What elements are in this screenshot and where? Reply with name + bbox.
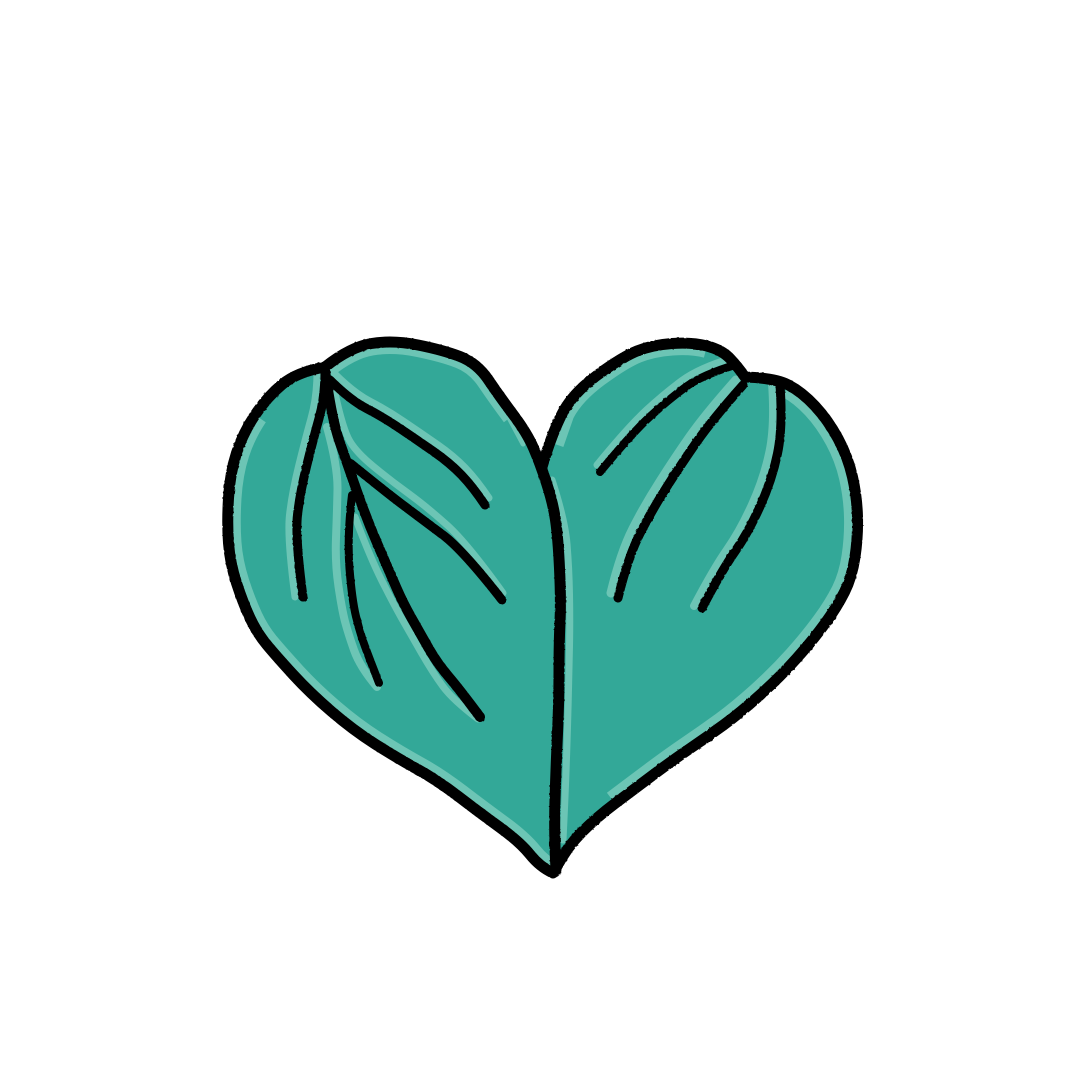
outline: left lobe <box>228 367 553 873</box>
vein: left branch lower <box>349 495 379 683</box>
vein: left branch right <box>350 463 502 600</box>
vein: far left <box>297 372 325 597</box>
outline: inner fold vein <box>330 380 485 505</box>
vein: main left <box>325 370 480 717</box>
icon: heart leaf teal fill <box>228 342 858 873</box>
vein: right leaf upper <box>600 365 735 472</box>
vein: right leaf middle <box>618 385 743 598</box>
outline: right lobe <box>542 343 858 868</box>
vein: right leaf lower <box>702 385 781 608</box>
outline: heart and leaf veins <box>228 342 858 873</box>
illustration: heart-shaped leaf <box>222 336 864 878</box>
outline: top fold and central rib <box>325 342 560 870</box>
highlights: pale teal leaf accents <box>228 342 858 873</box>
